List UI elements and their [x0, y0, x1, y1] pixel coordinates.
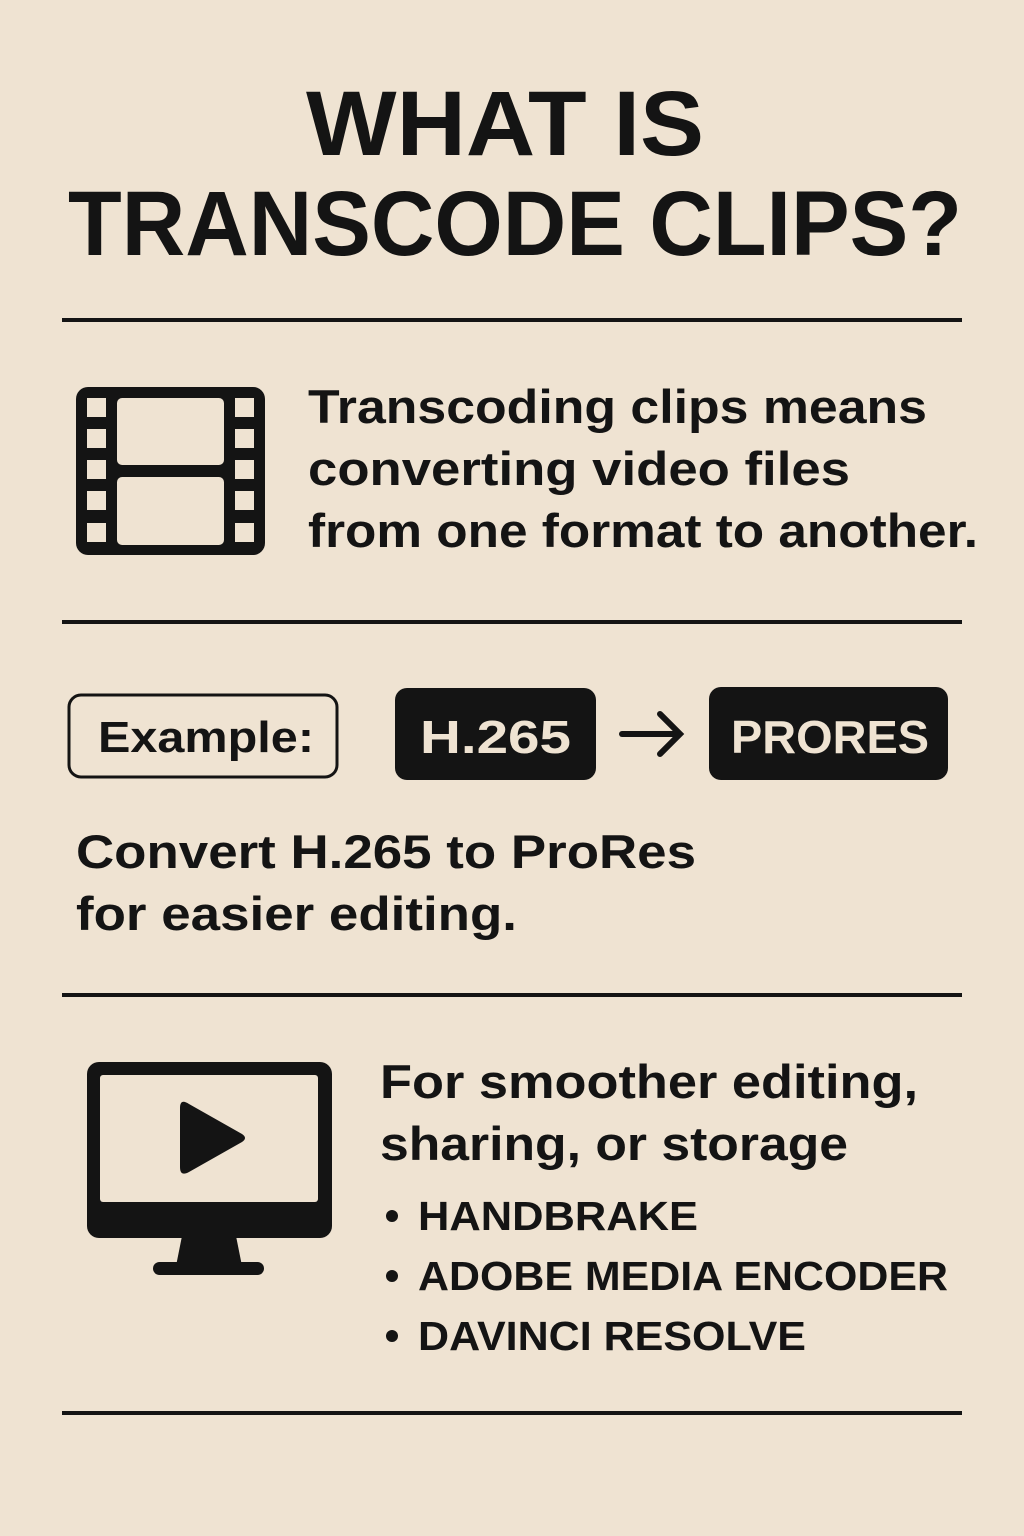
example description [76, 825, 696, 940]
icon: film strip [76, 387, 265, 555]
definition text: from one format to another. [308, 504, 978, 557]
arrow [622, 714, 680, 754]
title [68, 73, 962, 275]
definition text [308, 380, 978, 557]
uses text and tools list: ADOBE MEDIA ENCODER [418, 1253, 948, 1299]
example label box: Example: [98, 713, 314, 762]
uses text and tools list: HANDBRAKE [418, 1193, 698, 1239]
example label box [69, 695, 337, 777]
box: H.265 [395, 688, 596, 780]
example description: Convert H.265 to ProRes [76, 825, 696, 878]
title: TRANSCODE CLIPS? [68, 173, 962, 275]
definition text: converting video files [308, 442, 850, 495]
title: WHAT IS [306, 73, 704, 175]
uses text and tools list: DAVINCI RESOLVE [418, 1313, 806, 1359]
icon: monitor with play [87, 1062, 332, 1275]
example description: for easier editing. [76, 887, 517, 940]
box: PRORES [709, 687, 948, 780]
uses text and tools list [380, 1055, 948, 1359]
uses text and tools list: For smoother editing, [380, 1055, 918, 1108]
box: PRORES: PRORES [731, 711, 929, 763]
definition text: Transcoding clips means [308, 380, 927, 433]
box: H.265: H.265 [420, 711, 571, 763]
uses text and tools list: sharing, or storage [380, 1117, 848, 1170]
